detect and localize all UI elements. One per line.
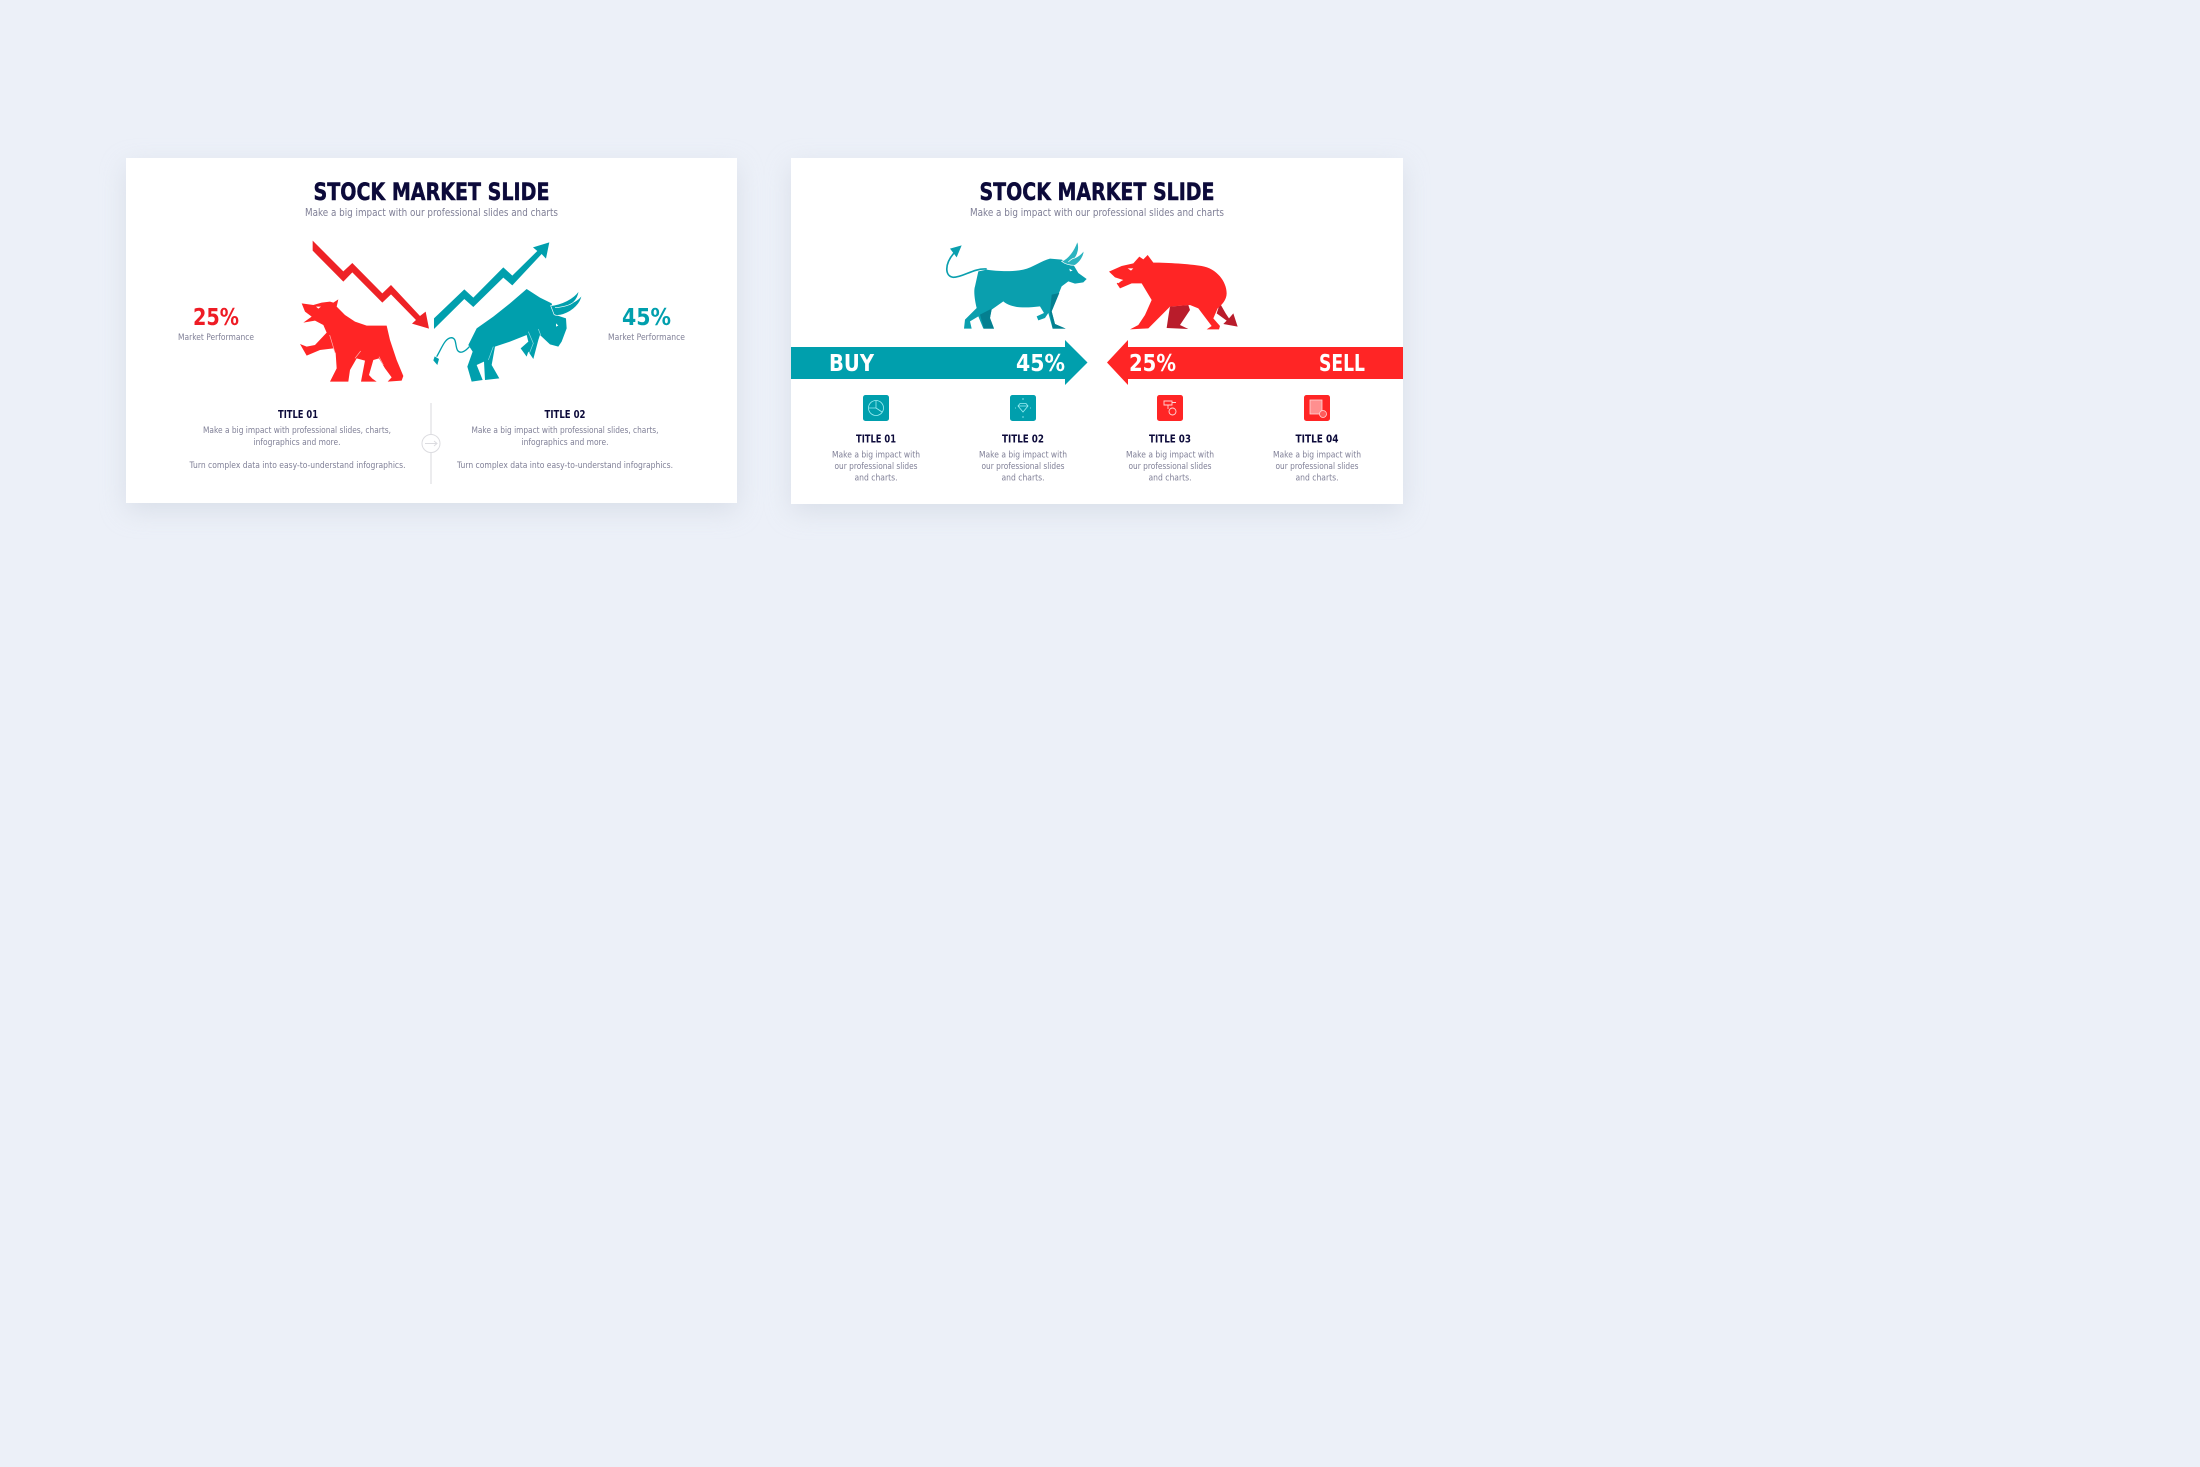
column: title 03: TITLE 03 [1149,432,1191,446]
column: title 04: and charts. [1296,474,1338,484]
panel: buy and sell slide [791,158,1403,512]
column: title 03: our professional slides [1128,462,1212,472]
text block: title 02: infographics and more. [522,438,608,448]
banner: buy arrow: 45% [1016,351,1065,377]
title: STOCK MARKET SLIDE [980,178,1214,206]
text block: title 01: infographics and more. [254,438,340,448]
icon: calendar [1304,395,1330,421]
banner: sell arrow: SELL [1319,351,1365,377]
icon: pie chart [863,395,889,421]
text block: title 01 [189,408,406,471]
icon: rearing red bear [300,299,403,382]
stat: 45 percent: Market Performance [608,333,685,343]
text block: title 01: Turn complex data into easy-to-understand infographics. [189,461,406,471]
banner: sell arrow [1107,340,1403,385]
column: title 03 [1126,395,1214,484]
divider with arrow circle [422,403,440,484]
column: title 02: TITLE 02 [1002,432,1044,446]
icon: growling red bear [1109,255,1238,329]
column: title 02: our professional slides [982,462,1065,472]
arrow: rising teal zigzag [434,242,549,329]
stat: 25 percent: Market Performance [178,333,254,343]
banner: buy arrow: BUY [829,351,874,377]
subtitle: Make a big impact with our professional slides and charts [305,207,558,219]
banner: buy arrow [791,340,1088,385]
column: title 01: Make a big impact with [832,450,920,460]
column: title 02 [979,395,1067,484]
icon: faucet [1157,395,1183,421]
stat: 45 percent [608,305,685,343]
column: title 01: TITLE 01 [856,432,896,446]
column: title 03: Make a big impact with [1126,450,1214,460]
stat: 25 percent: 25% [193,305,239,331]
text block: title 01: TITLE 01 [278,408,318,421]
column: title 04: our professional slides [1276,462,1359,472]
column: title 02: Make a big impact with [979,450,1067,460]
column: title 04: Make a big impact with [1273,450,1361,460]
column: title 01: and charts. [854,474,898,484]
text block: title 02: TITLE 02 [544,408,586,421]
icon: charging teal bull [433,289,582,382]
text block: title 02: Turn complex data into easy-to-understand infographics. [456,461,673,471]
panel: bull and bear performance slide [126,158,737,511]
stat: 45 percent: 45% [622,305,671,331]
text block: title 02 [456,408,673,471]
column: title 01 [832,395,920,484]
column: title 04: TITLE 04 [1296,432,1339,446]
banner: sell arrow: 25% [1129,351,1176,377]
arrow: falling red zigzag [313,241,429,329]
column: title 02: and charts. [1002,474,1044,484]
text block: title 01: Make a big impact with professional slides, charts, [203,426,391,436]
title: STOCK MARKET SLIDE [314,178,550,206]
icon: diamond [1010,395,1036,421]
subtitle: Make a big impact with our professional slides and charts [970,207,1224,219]
column: title 01: our professional slides [834,462,918,472]
column: title 03: and charts. [1148,474,1192,484]
stat: 25 percent [178,305,254,343]
text block: title 02: Make a big impact with professional slides, charts, [472,426,658,436]
column: title 04 [1273,395,1361,484]
icon: walking teal bull [947,241,1087,329]
